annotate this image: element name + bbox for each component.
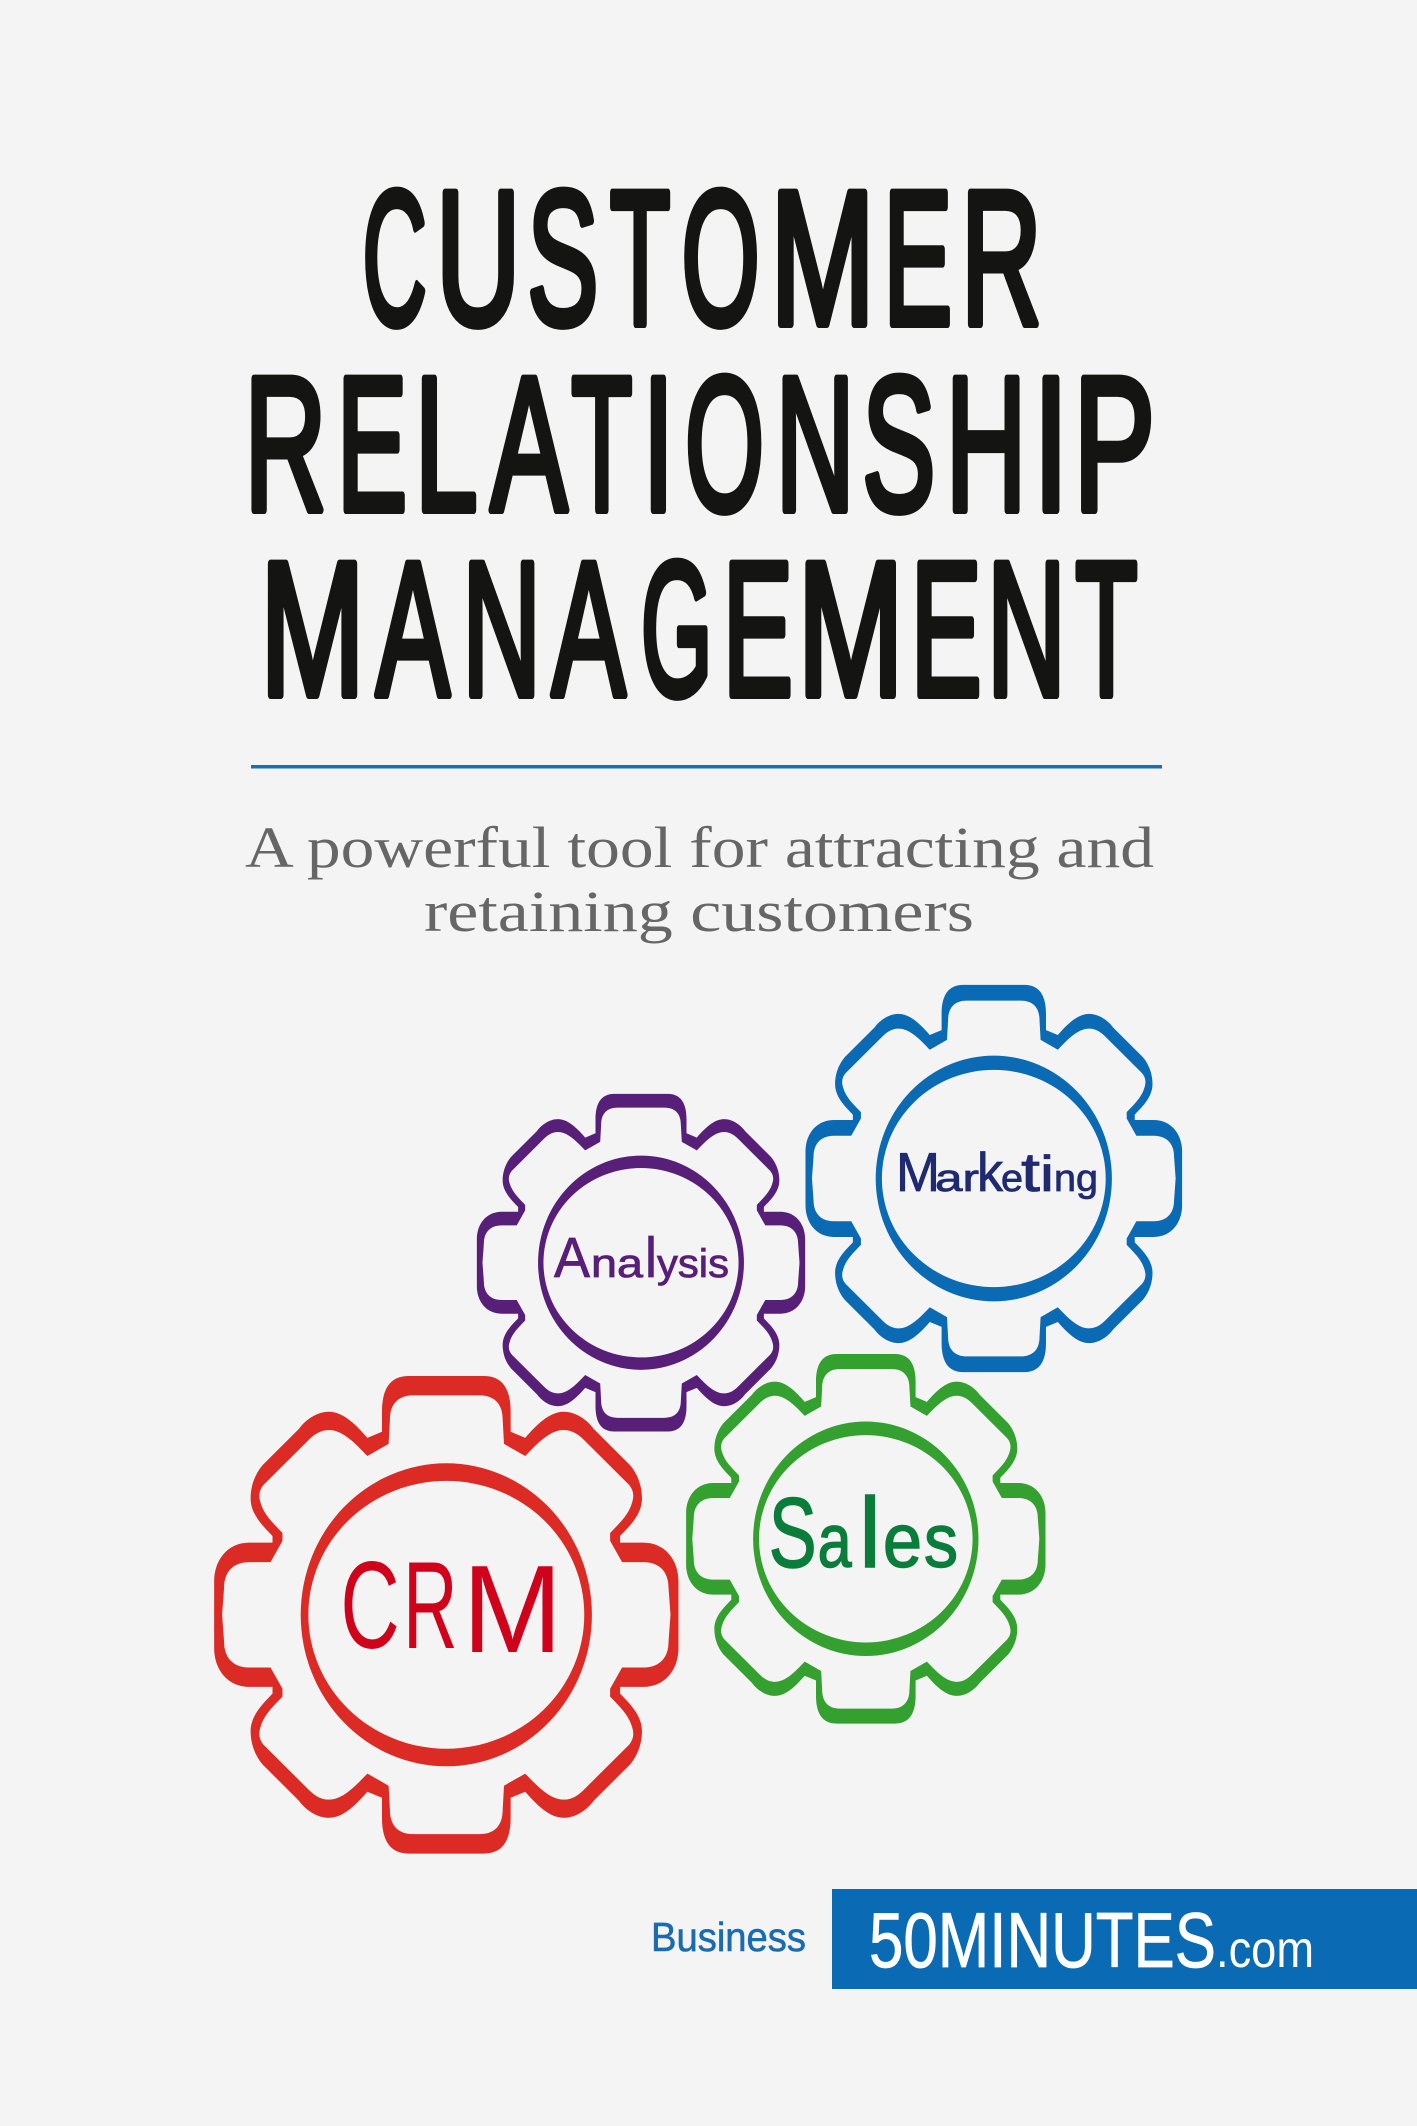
gear: Marketing: ng [1054,1158,1098,1200]
title: G [641,523,712,736]
title: M [260,523,365,736]
title: T [610,152,670,365]
gear: Marketing: k [977,1141,1003,1203]
title: M [798,523,904,736]
title: A [491,338,568,551]
title: O [682,152,760,365]
title: E [911,523,982,736]
subtitle: A powerful tool for attracting and [245,815,1154,880]
gear: CRM: M [462,1541,562,1679]
logo: 50MINUTES.com [832,1889,1417,1989]
gear: CRM [214,1376,678,1854]
gear: Marketing: i [1040,1146,1054,1202]
gear: Analysis: A [554,1226,590,1290]
title [244,152,1155,736]
title: S [527,152,598,365]
title: A [552,523,626,736]
gear: Sales: e [883,1499,922,1584]
title: A [376,523,450,736]
title: O [685,338,764,551]
gear: Analysis [477,1094,805,1432]
title: N [462,523,541,736]
gear: Sales: S [769,1477,817,1588]
category label: Business: Business [651,1914,806,1960]
title: I [643,338,674,551]
gear: Marketing: t [1021,1141,1040,1203]
title: R [961,152,1042,365]
subtitle [245,815,1154,944]
gear: Sales: a [818,1499,852,1584]
title: N [987,523,1066,736]
gear: Analysis: ysis [657,1242,729,1286]
title: H [946,338,1026,551]
title: E [337,338,407,551]
title: I [1033,338,1068,551]
gear: Analysis: l [645,1226,657,1290]
title: P [1074,338,1155,551]
gear: Marketing: ar [935,1158,979,1200]
title: E [884,152,952,365]
gear: Marketing: M [896,1141,940,1203]
gear: Analysis: na [591,1242,644,1286]
title: S [862,338,935,551]
title: T [571,338,632,551]
title: R [244,338,326,551]
subtitle: retaining customers [424,879,974,944]
title: M [770,152,875,365]
gear: Sales: s [924,1499,958,1584]
gear: CRM: R [403,1537,458,1675]
gear: Marketing: e [1001,1158,1023,1200]
gear: Marketing [806,985,1182,1372]
title: U [436,152,520,365]
logo: 50MINUTES.com: 50MINUTES [869,1896,1216,1984]
gear: Sales [686,1354,1045,1724]
title: C [362,152,427,365]
title: T [1075,523,1138,736]
title: L [415,338,478,551]
title: N [776,338,854,551]
gear: Sales: l [859,1477,881,1588]
gear: CRM: C [340,1537,400,1675]
logo: 50MINUTES.com: .com [1216,1921,1314,1979]
title: E [723,523,793,736]
